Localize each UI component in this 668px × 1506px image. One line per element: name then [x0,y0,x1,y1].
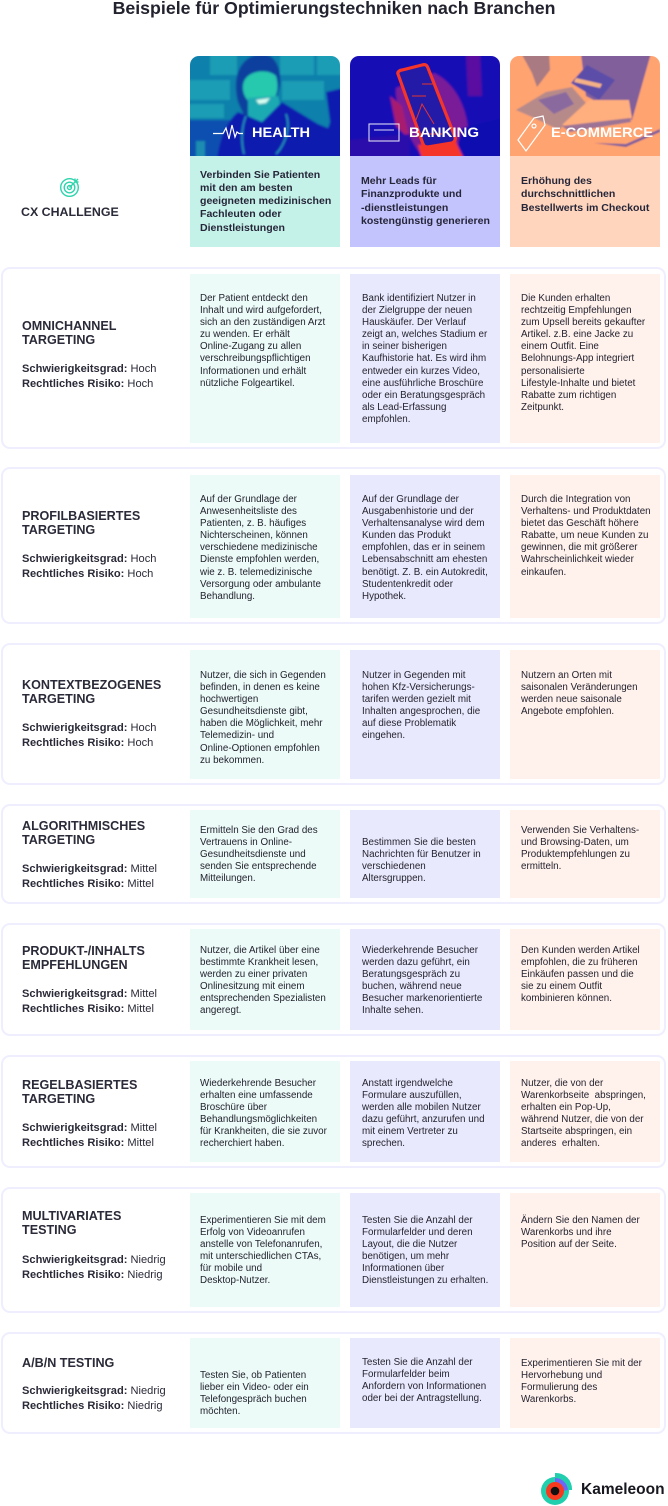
banking example: Dienstleistungen zu erhalten. [362,1275,488,1286]
banking example: Studentenkredit oder [362,579,453,590]
e-commerce example [510,1061,660,1162]
label: health: HEALTH [252,124,310,140]
challenge: health: Dienstleistungen [200,222,285,234]
health example: Online-Zugang zu allen [200,341,301,352]
banking example: in seiner bisherigen [362,341,447,352]
technique name [22,819,145,847]
icon: card [369,124,399,141]
e-commerce example: saisonalen Veränderungen [521,682,638,693]
difficulty and legal risk: Rechtliches Risiko: Mittel [22,878,154,890]
difficulty and legal risk: Schwierigkeitsgrad: Niedrig [22,1254,166,1266]
e-commerce example: einkaufen. [521,567,566,578]
e-commerce example: Verhaltens- und Produktdaten [521,506,651,517]
health example: Testen Sie, ob Patienten [200,1370,306,1381]
e-commerce example: Startseite abspringen, ein [521,1126,632,1137]
row: regelbasiertes targeting [1,1055,666,1168]
banking example [350,929,500,1030]
health example: verschiedene medizinische [200,542,318,553]
e-commerce example: Einkäufen passen und die [521,969,634,980]
challenge: banking: Finanzprodukte und [361,188,462,200]
difficulty and legal risk: Schwierigkeitsgrad: Mittel [22,863,157,875]
health example: Gesundheitsdienste gibt, [200,706,308,717]
banking example: als Lead-Erfassung [362,402,446,413]
technique name: REGELBASIERTES [22,1078,137,1092]
difficulty and legal risk: Rechtliches Risiko: Mittel [22,1003,154,1015]
health example: Nichterscheinen, können [200,530,308,541]
banking example: Inhalten angesprochen, die [362,706,480,717]
banking example: Kaufhistorie hat. Es wird ihm [362,353,486,364]
challenge: health: Fachleuten oder [200,208,281,220]
technique name: TARGETING [22,692,95,706]
banking example: verschiedenen [362,861,426,872]
banking example: Inhalte sehen. [362,1005,424,1016]
banking example: der Zielgruppe der neuen [362,305,472,316]
banking example: buchen, während neue [362,981,462,992]
label: e-commerce: E-COMMERCE [551,124,653,140]
banking example: Formulare auszufüllen, [362,1090,462,1101]
label: banking: BANKING [409,124,479,140]
banking example: Beratungsgespräch zu [362,969,460,980]
difficulty and legal risk: Rechtliches Risiko: Hoch [22,378,153,390]
e-commerce example [510,1338,660,1428]
banking example: Informationen über [362,1263,444,1274]
e-commerce example: Rabatte, um neue Kunden zu [521,530,648,541]
difficulty and legal risk [22,553,156,580]
health example: erhalten eine umfassende [200,1090,313,1101]
health example [190,650,340,779]
health example: Anwesenheitsliste des [200,506,297,517]
health example: befinden, in denen es keine [200,682,320,693]
health example: für Krankheiten, die sie zuvor [200,1126,327,1137]
health example [190,1338,340,1428]
banking example: werden alle mobilen Nutzer [362,1102,481,1113]
health example: Vertrauens in Online- [200,837,292,848]
wordmark: Kameleoon [581,1481,665,1498]
banking example: eingehen. [362,730,405,741]
technique name: PRODUKT-/INHALTS [22,944,145,958]
health example: Behandlungsmöglichkeiten [200,1114,317,1125]
e-commerce example: gewinnen, die mit größerer [521,542,638,553]
e-commerce example: Produktempfehlungen zu [521,849,630,860]
health example: angeregt. [200,1005,241,1016]
difficulty and legal risk [22,1385,166,1412]
health example: wie z. B. telemedizinische [200,567,312,578]
row: multivariates testing [1,1187,666,1313]
e-commerce example: Ändern Sie den Namen der [521,1215,640,1226]
health example: haben die Möglichkeit, mehr [200,718,323,729]
difficulty and legal risk: Schwierigkeitsgrad: Hoch [22,363,156,375]
e-commerce example: Belohnungs-App integriert [521,353,634,364]
health example: recherchiert haben. [200,1138,284,1149]
banking example [350,810,500,898]
banking example [350,1338,500,1428]
e-commerce example: ermitteln. [521,861,561,872]
health example: Gesundheitsdienste und [200,849,306,860]
health example: mit unterschiedlichen CTAs, [200,1251,321,1262]
e-commerce example: Warenkorbs. [521,1394,576,1405]
technique name: TARGETING [22,1092,95,1106]
banking example: benötigen, um mehr [362,1251,449,1262]
health example: zu wenden. Er erhält [200,329,290,340]
banking example [350,650,500,779]
difficulty and legal risk [22,1254,166,1281]
banking example: Lebensabschnitt am ehesten [362,554,487,565]
banking example: entweder ein kurzes Video, [362,366,480,377]
health example: Broschüre über [200,1102,267,1113]
difficulty and legal risk: Schwierigkeitsgrad: Mittel [22,988,157,1000]
banking example: auf diese Problematik [362,718,456,729]
e-commerce example: bietet das Geschäft höhere [521,518,639,529]
difficulty and legal risk [22,363,156,390]
health example: hochwertigen [200,694,258,705]
banking example: empfohlen. [362,414,410,425]
e-commerce example: Wahrscheinlichkeit wieder [521,554,634,565]
e-commerce example: während Nutzer, die von der [521,1114,644,1125]
health example: verschreibungspflichtigen [200,353,311,364]
technique name: EMPFEHLUNGEN [22,958,128,972]
technique name [22,678,161,706]
difficulty and legal risk: Schwierigkeitsgrad: Niedrig [22,1385,166,1397]
health example: Wiederkehrende Besucher [200,1078,316,1089]
banking example: oder ein Beratungsgespräch [362,390,485,401]
row: a/b/n testing [1,1332,666,1434]
health example [190,274,340,443]
e-commerce example [510,274,660,443]
banking example: Formularfelder beim [362,1369,450,1380]
health example: Mitteilungen. [200,873,256,884]
row: profilbasiertes targeting [1,467,666,624]
row: kontextbezogenes targeting [1,643,666,785]
e-commerce example: sie zu einem Outfit [521,981,602,992]
health example: für mobile und [200,1263,262,1274]
health example: Ermitteln Sie den Grad des [200,825,318,836]
challenge: e-commerce: Bestellwerts im Checkout [521,202,649,214]
health example [190,475,340,618]
banking example [350,1193,500,1307]
health example: lieber ein Video- oder ein [200,1382,309,1393]
difficulty and legal risk [22,863,157,890]
technique name: TESTING [22,1223,77,1237]
health example: bestimmte Krankheit lesen, [200,957,318,968]
difficulty and legal risk: Rechtliches Risiko: Niedrig [22,1400,163,1412]
technique name: TARGETING [22,523,95,537]
banking example: Bestimmen Sie die besten [362,837,476,848]
e-commerce example: anderes erhalten. [521,1138,600,1149]
challenge: health: geeigneten medizinischen [200,195,331,207]
technique name [22,319,116,347]
technique name: MULTIVARIATES [22,1209,121,1223]
e-commerce example: kombinieren können. [521,993,612,1004]
health example: Desktop-Nutzer. [200,1275,270,1286]
challenge: health: mit den am besten [200,182,293,194]
banking example: oder bei der Antragstellung. [362,1393,482,1404]
challenge: e-commerce: Erhöhung des [521,175,592,187]
banking example: tarifen werden gezielt mit [362,694,471,705]
e-commerce example: erhalten ein Pop-Up, [521,1102,611,1113]
e-commerce example: einem Outfit. Eine [521,341,599,352]
difficulty and legal risk [22,722,156,749]
banking example: Kunden das Produkt [362,530,451,541]
health example: zu bekommen. [200,755,264,766]
technique name: A/B/N TESTING [22,1356,114,1370]
challenge: banking [350,156,500,247]
health example: Patienten, z. B. häufiges [200,518,306,529]
icon: logo mark [541,1473,572,1505]
e-commerce example: Nutzer, die von der [521,1078,603,1089]
banking example: Anfordern von Informationen [362,1381,486,1392]
banking example [350,274,500,443]
challenge: health: Verbinden Sie Patienten [200,168,320,180]
health example: Behandlung. [200,591,255,602]
health example: nützliche Folgeartikel. [200,378,295,389]
e-commerce example: Experimentieren Sie mit der [521,1358,642,1369]
banking example: Hauskäufer. Der Verlauf [362,317,466,328]
e-commerce example: zum Upsell bereits gekaufter [521,317,645,328]
e-commerce example: Warenkorbseite abspringen, [521,1090,646,1101]
column header: health [190,56,340,156]
icon: price tag [518,116,545,151]
e-commerce example: Hervorhebung und [521,1370,602,1381]
health example: Nutzer, die Artikel über eine [200,945,320,956]
banking example: Nutzer in Gegenden mit [362,670,465,681]
health example: möchten. [200,1406,240,1417]
e-commerce example: Die Kunden erhalten [521,293,610,304]
health example [190,1193,340,1307]
health example: Onlinesitzung mit einem [200,981,305,992]
banking example: Verhaltensanalyse wird dem [362,518,485,529]
e-commerce example: Rabatte zum richtigen [521,390,616,401]
e-commerce example: Warenkorbs und ihre [521,1227,612,1238]
banking example: eine ausführliche Broschüre [362,378,483,389]
banking example: dazu geführt, anzurufen und [362,1114,485,1125]
banking example: werden dazu geführt, ein [362,957,470,968]
health example: Experimentieren Sie mit dem [200,1215,326,1226]
banking example: zeigt an, welches Stadium er [362,329,487,340]
difficulty and legal risk: Rechtliches Risiko: Hoch [22,737,153,749]
banking example: Altersgruppen. [362,873,426,884]
health example [190,810,340,898]
banking example [350,475,500,618]
difficulty and legal risk: Schwierigkeitsgrad: Hoch [22,553,156,565]
banking example: Anstatt irgendwelche [362,1078,453,1089]
banking example: Formularfelder und deren [362,1227,473,1238]
e-commerce example: Verwenden Sie Verhaltens- [521,825,639,836]
row: produkt-/inhaltsempfehlungen [1,923,666,1036]
row: omnichannel targeting [1,267,666,449]
banking example: Besucher markenorientierte [362,993,482,1004]
challenge: banking: -dienstleistungen [361,202,448,214]
health example: Telefongespräch buchen [200,1394,307,1405]
label: cx challenge: CX CHALLENGE [21,205,119,219]
difficulty and legal risk: Schwierigkeitsgrad: Hoch [22,722,156,734]
banking example: Testen Sie die Anzahl der [362,1357,473,1368]
health example: Inhalt und wird aufgefordert, [200,305,322,316]
technique name: OMNICHANNEL [22,319,116,333]
column header: e-commerce [510,56,660,156]
e-commerce example: Angebote empfohlen. [521,706,614,717]
health example: Erfolg von Videoanrufen [200,1227,305,1238]
health example: Auf der Grundlage der [200,494,297,505]
technique name: KONTEXTBEZOGENES [22,678,161,692]
icon: target [60,178,79,197]
challenge: banking: Mehr Leads für [361,175,437,187]
difficulty and legal risk: Rechtliches Risiko: Hoch [22,568,153,580]
difficulty and legal risk [22,988,157,1015]
health example: senden Sie entsprechende [200,861,317,872]
banking example: Wiederkehrende Besucher [362,945,478,956]
health example: anstelle von Telefonanrufen, [200,1239,322,1250]
difficulty and legal risk: Schwierigkeitsgrad: Mittel [22,1122,157,1134]
difficulty and legal risk [22,1122,157,1149]
e-commerce example [510,650,660,779]
banking example [350,1061,500,1162]
banking example: Bank identifiziert Nutzer in [362,293,476,304]
banking example: Testen Sie die Anzahl der [362,1215,473,1226]
challenge: banking: kostengünstig generieren [361,215,490,227]
technique name [22,509,140,537]
health example: werden zu einer privaten [200,969,307,980]
health example: Versorgung oder ambulante [200,579,321,590]
health example: sich an den zuständigen Arzt [200,317,325,328]
banking example: Hypothek. [362,591,406,602]
logo: kameleoon [541,1473,665,1505]
health example: entsprechenden Spezialisten [200,993,326,1004]
e-commerce example [510,1193,660,1307]
e-commerce example: Lifestyle-Inhalte und bietet [521,378,635,389]
banking example: hohen Kfz-Versicherungs- [362,682,475,693]
column header: banking [350,56,500,156]
e-commerce example: Durch die Integration von [521,494,630,505]
banking example: mit einem Vertreter zu [362,1126,458,1137]
e-commerce example: Artikel. z.B. eine Jacke zu [521,329,633,340]
banking example: benötigt. Z. B. ein Autokredit, [362,567,488,578]
health example: Informationen und erhält [200,366,306,377]
health example [190,1061,340,1162]
e-commerce example [510,810,660,898]
e-commerce example: rechtzeitig Empfehlungen [521,305,632,316]
health example: Nutzer, die sich in Gegenden [200,670,326,681]
technique name: TARGETING [22,333,95,347]
banking example: Ausgabenhistorie und der [362,506,474,517]
health example [190,929,340,1030]
banking example: sprechen. [362,1138,405,1149]
technique name [22,1078,137,1106]
technique name: PROFILBASIERTES [22,509,140,523]
icon: heartbeat [213,125,243,139]
e-commerce example: Zeitpunkt. [521,402,564,413]
technique name: ALGORITHMISCHES [22,819,145,833]
challenge: e-commerce: durchschnittlichen [521,188,615,200]
banking example: Layout, die die Nutzer [362,1239,457,1250]
e-commerce example: empfohlen, die zu früheren [521,957,638,968]
e-commerce example: und Browsing-Daten, um [521,837,629,848]
health example: Dienste empfohlen werden, [200,554,319,565]
e-commerce example: werden neue saisonale [521,694,622,705]
banking example: Auf der Grundlage der [362,494,459,505]
banking example: Nachrichten für Benutzer in [362,849,481,860]
e-commerce example [510,929,660,1030]
health example: Der Patient entdeckt den [200,293,308,304]
banking example: empfohlen, das er in seinem [362,542,485,553]
health example: Online-Optionen empfohlen [200,743,320,754]
e-commerce example: Formulierung des [521,1382,597,1393]
e-commerce example: Den Kunden werden Artikel [521,945,640,956]
challenge: health [190,156,340,247]
technique name [22,944,145,972]
health example: Telemedizin- und [200,730,274,741]
e-commerce example: Position auf der Seite. [521,1239,617,1250]
challenge: e-commerce [510,156,660,247]
e-commerce example [510,475,660,618]
e-commerce example: personalisierte [521,366,585,377]
technique name: TARGETING [22,833,95,847]
e-commerce example: Nutzern an Orten mit [521,670,612,681]
technique name [22,1209,121,1237]
difficulty and legal risk: Rechtliches Risiko: Mittel [22,1137,154,1149]
row: algorithmisches targeting [1,804,666,904]
difficulty and legal risk: Rechtliches Risiko: Niedrig [22,1269,163,1281]
